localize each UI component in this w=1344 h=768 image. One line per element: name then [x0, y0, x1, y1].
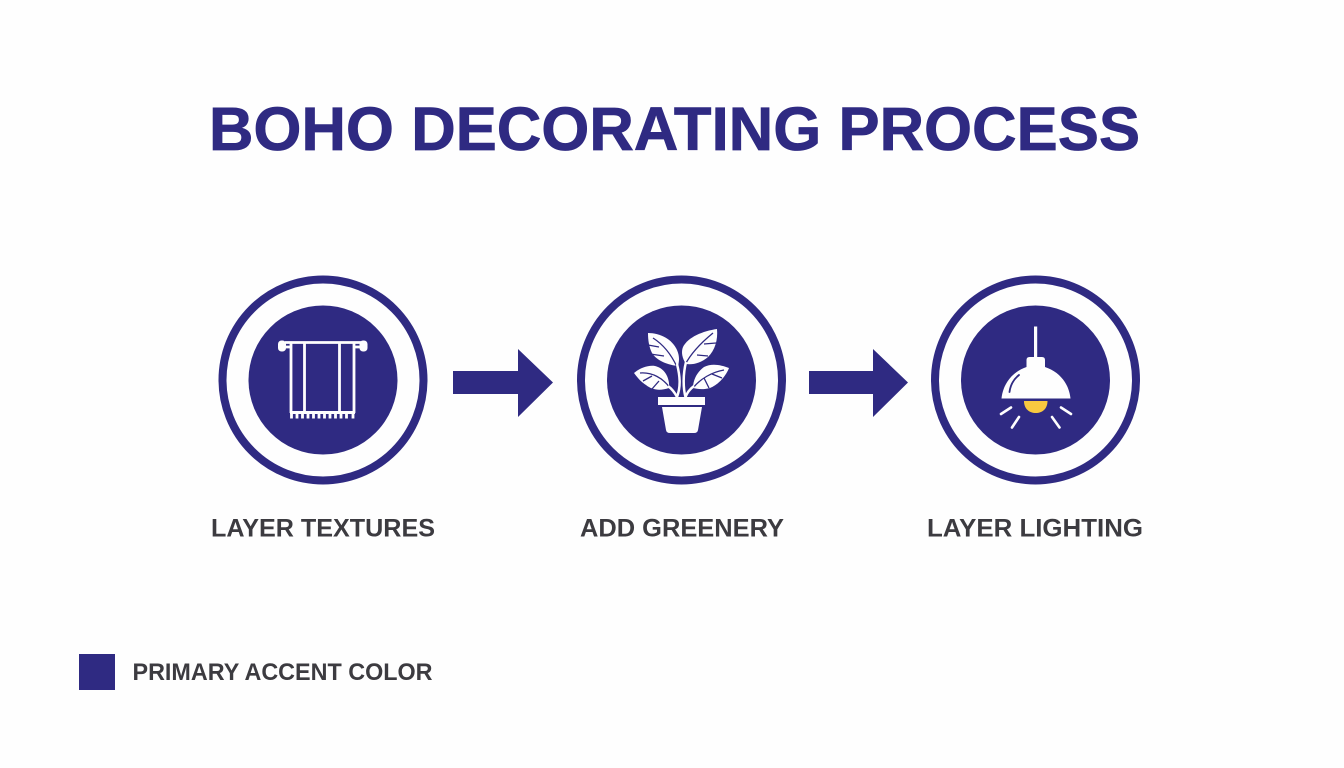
arrow 1: [453, 349, 553, 417]
icon: potted plant: [634, 329, 729, 433]
outer ring 1: [222, 280, 424, 480]
legend label: PRIMARY ACCENT COLOR: [132, 659, 432, 686]
label: add greenery: ADD GREENERY: [580, 514, 784, 542]
step 3: layer lighting: [935, 280, 1136, 480]
icon: pendant lamp: [1001, 326, 1071, 428]
outer ring 2: [581, 280, 782, 480]
step 1: layer textures: [222, 280, 424, 480]
legend swatch: [79, 654, 115, 690]
label: layer lighting: LAYER LIGHTING: [927, 514, 1143, 542]
inner disc 3: [961, 306, 1110, 454]
title: BOHO DECORATING PROCESS: [209, 95, 1140, 164]
arrow 2: [809, 349, 908, 417]
step 2: add greenery: [581, 280, 782, 480]
icon: towel on rail: [278, 340, 368, 418]
inner disc 2: [607, 306, 756, 454]
outer ring 3: [935, 280, 1136, 480]
inner disc 1: [248, 306, 398, 454]
label: layer textures: LAYER TEXTURES: [211, 514, 435, 542]
